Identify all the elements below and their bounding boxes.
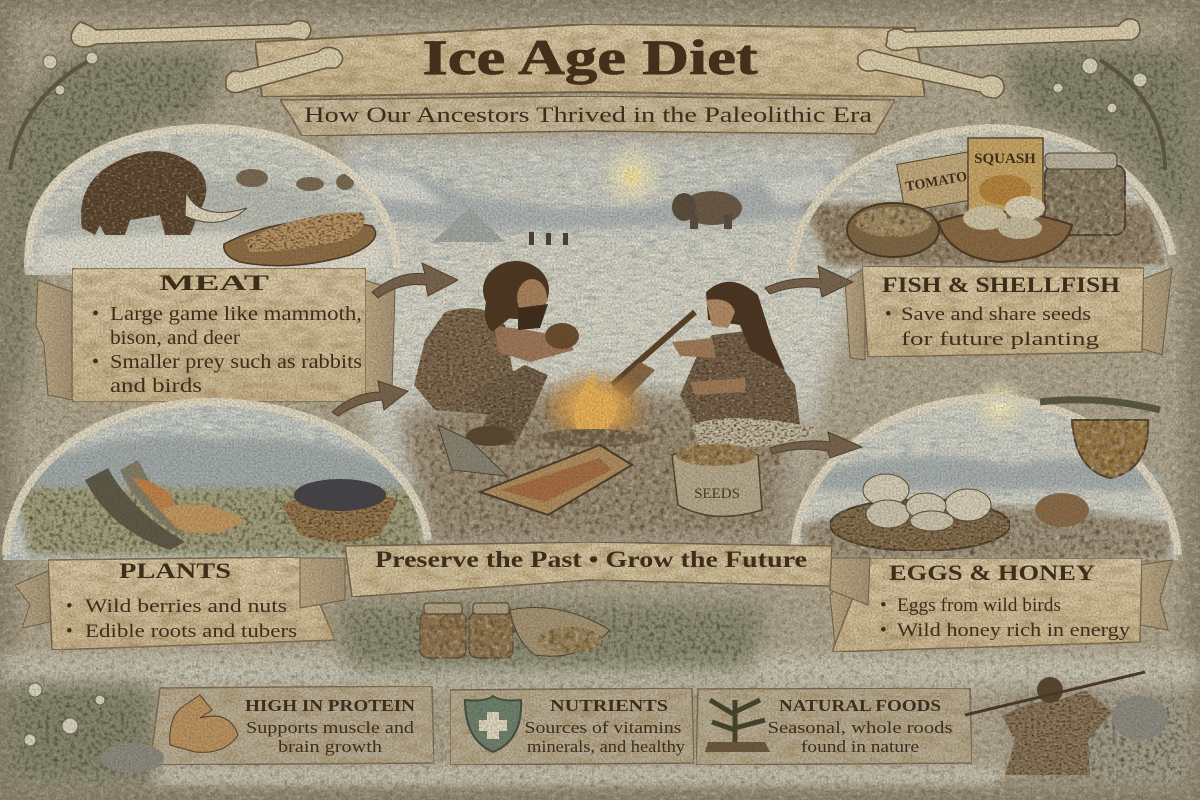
panel: plants (3, 400, 430, 650)
banner: preserve the past: Preserve the Past • Grow the Future (375, 547, 807, 572)
panel: plants: Edible roots and tubers (85, 621, 297, 642)
panel: plants: • (66, 621, 73, 642)
panel: eggs and honey: • (880, 595, 887, 616)
icon: shield (465, 696, 521, 752)
panel: eggs and honey: Wild honey rich in energy (897, 620, 1131, 641)
distant mammoth (672, 191, 742, 229)
panel: fish and shellfish: for future planting (901, 329, 1100, 350)
icon: honeycomb nest (1040, 400, 1160, 478)
card: nutrients (450, 688, 694, 765)
illustration: seeds sack (672, 444, 762, 516)
benefits strip (150, 686, 972, 765)
bones (71, 19, 1140, 98)
illustration: campfire (534, 366, 653, 450)
icon: seed bowl (847, 203, 939, 257)
panel: eggs and honey: • (880, 620, 887, 641)
panel: meat: bison, and deer (110, 327, 240, 349)
illustration: seed jars and sack (420, 603, 610, 658)
illustration: tray of meat (480, 445, 632, 515)
ground around the fire (400, 392, 795, 543)
card: natural foods (696, 688, 972, 765)
panel: eggs and honey: Eggs from wild birds (897, 595, 1061, 616)
card: high in protein: brain growth (278, 737, 383, 756)
card: high in protein (150, 686, 434, 765)
icon: plant sprout (705, 700, 770, 752)
panel: meat: and birds (110, 375, 202, 397)
panel: meat: Large game like mammoth, (110, 303, 362, 325)
card: nutrients: NUTRIENTS (550, 696, 668, 715)
panel: meat: MEAT (159, 270, 270, 295)
icon: meat platter (224, 212, 376, 266)
icon: flexed arm (170, 695, 238, 752)
panel: fish and shellfish (790, 128, 1172, 360)
panel: fish and shellfish: • (885, 304, 892, 325)
panel: eggs and honey (790, 375, 1178, 652)
icon: tomato seed packet (897, 152, 976, 212)
icon: roots and vegetables (85, 460, 245, 550)
card: nutrients: Sources of vitamins (524, 718, 682, 737)
illustration: wildflowers bottom left (100, 743, 164, 773)
subtitle banner: How Our Ancestors Thrived in the Paleolithic Era (304, 102, 872, 127)
title: Ice Age Diet (422, 29, 758, 85)
subtitle banner (280, 96, 895, 136)
icon: berry basket (282, 479, 398, 542)
card: nutrients: minerals, and healthy (527, 737, 686, 756)
panel: plants: Wild berries and nuts (85, 596, 287, 617)
distant tent (432, 208, 505, 242)
card: natural foods: found in nature (801, 737, 919, 756)
illustration: flint rock (438, 425, 507, 476)
icon: squash seed packet (968, 138, 1043, 222)
panel: fish and shellfish: Save and share seeds (901, 304, 1091, 325)
panel: meat: Smaller prey such as rabbits (110, 351, 362, 373)
card: high in protein: HIGH IN PROTEIN (245, 696, 416, 715)
fish vignette (790, 128, 1172, 290)
arrow: to meat (372, 263, 458, 298)
card: natural foods: Seasonal, whole roods (768, 718, 952, 737)
panel: fish and shellfish: FISH & SHELLFISH (882, 272, 1120, 297)
arrow: to plants (332, 381, 408, 416)
panel: meat: • (92, 303, 99, 325)
icon: shellfish bowl (938, 196, 1072, 262)
icon: egg nest (830, 474, 1010, 551)
arrows (332, 263, 862, 458)
icon: seed jar (1045, 153, 1125, 235)
plants vignette (3, 400, 430, 560)
roasting stick (612, 312, 695, 385)
illustration: man by the fire (414, 261, 579, 446)
panel: eggs and honey: EGGS & HONEY (889, 560, 1095, 585)
icon: clay pot (1035, 493, 1089, 527)
central landscape scene (335, 140, 850, 540)
illustration: seeds sack: SEEDS (694, 486, 740, 502)
distant hunters (529, 232, 568, 245)
arrow: to eggs (770, 432, 862, 458)
title banner (255, 24, 925, 97)
panel: meat (24, 128, 397, 402)
panel: plants: PLANTS (119, 558, 231, 583)
eggs vignette (790, 375, 1178, 560)
illustration: spear hunter (965, 672, 1168, 775)
panel: plants: • (66, 596, 73, 617)
arrow: to fish (765, 266, 853, 297)
meat vignette (24, 128, 397, 275)
banner: preserve the past (300, 542, 870, 608)
card: high in protein: Supports muscle and (246, 718, 415, 737)
illustration: woman by the fire (612, 282, 818, 448)
icon: tomato seed packet: TOMATO (904, 169, 968, 195)
panel: meat: • (92, 351, 99, 373)
card: natural foods: NATURAL FOODS (779, 696, 941, 715)
icon: mammoth (81, 151, 247, 235)
icon: squash seed packet: SQUASH (974, 151, 1036, 167)
